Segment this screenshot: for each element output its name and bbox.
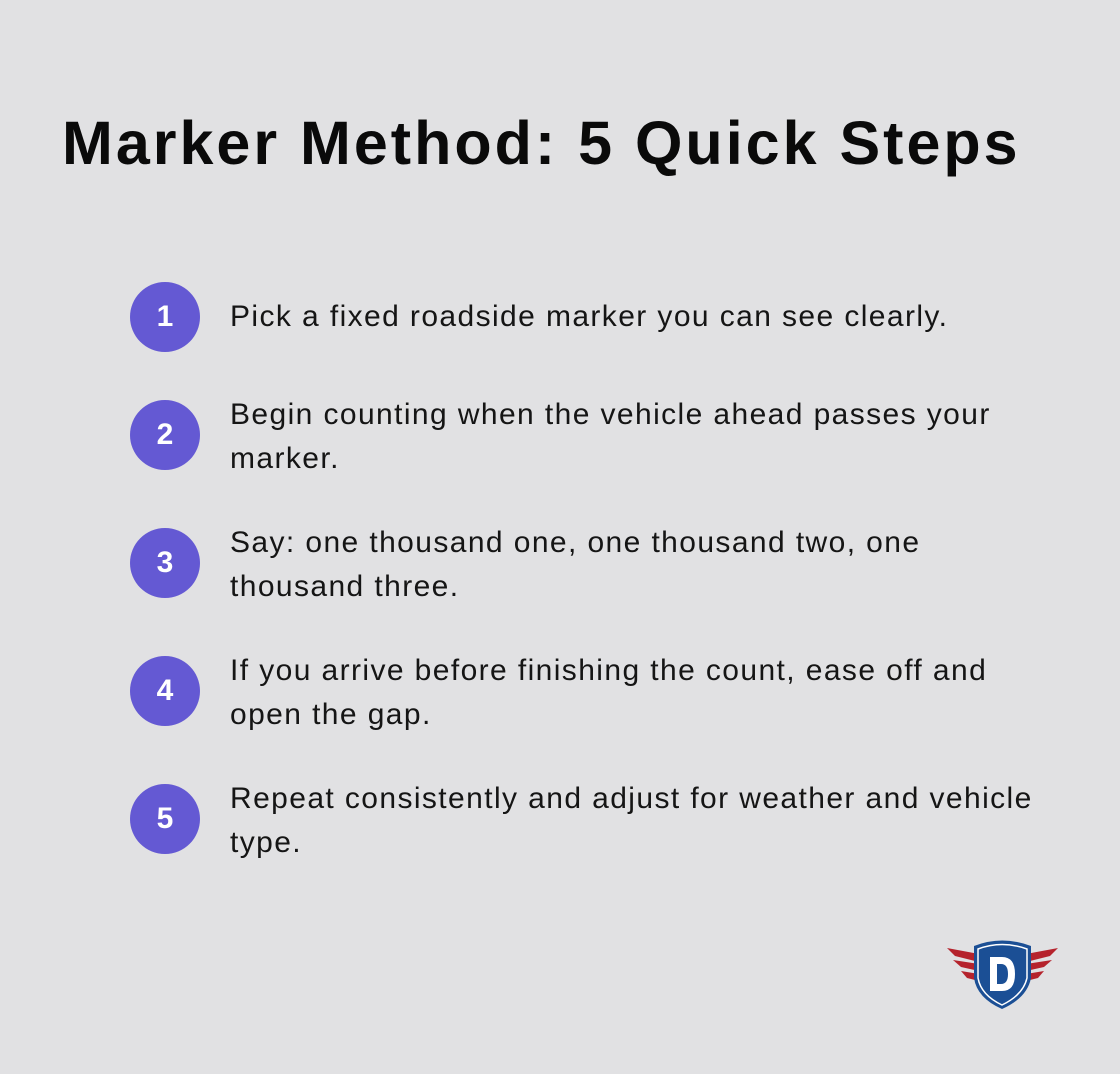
step 4: If you arrive before finishing the count, ease off and — [230, 654, 987, 687]
step 5: Repeat consistently and adjust for weather and vehicle — [230, 782, 1033, 815]
step 3 — [130, 526, 920, 603]
step 3: 3 — [157, 546, 173, 579]
step 3: Say: one thousand one, one thousand two, one — [230, 526, 920, 559]
step 5: 5 — [157, 802, 173, 835]
icon: logo shield with wings — [947, 940, 1058, 1009]
step 4 — [130, 654, 987, 731]
step 5 — [130, 782, 1033, 859]
step 3: thousand three. — [230, 570, 460, 603]
title: Marker Method: 5 Quick Steps — [62, 109, 1021, 177]
step 1: 1 — [157, 300, 173, 333]
step 4: 4 — [157, 674, 173, 707]
step 2 — [130, 398, 991, 475]
step 2: Begin counting when the vehicle ahead passes your — [230, 398, 991, 431]
step 5: type. — [230, 826, 302, 859]
step 2: marker. — [230, 442, 340, 475]
step 1: Pick a fixed roadside marker you can see clearly. — [230, 300, 948, 333]
step 1 — [130, 282, 948, 352]
step 4: open the gap. — [230, 698, 432, 731]
step 2: 2 — [157, 418, 173, 451]
